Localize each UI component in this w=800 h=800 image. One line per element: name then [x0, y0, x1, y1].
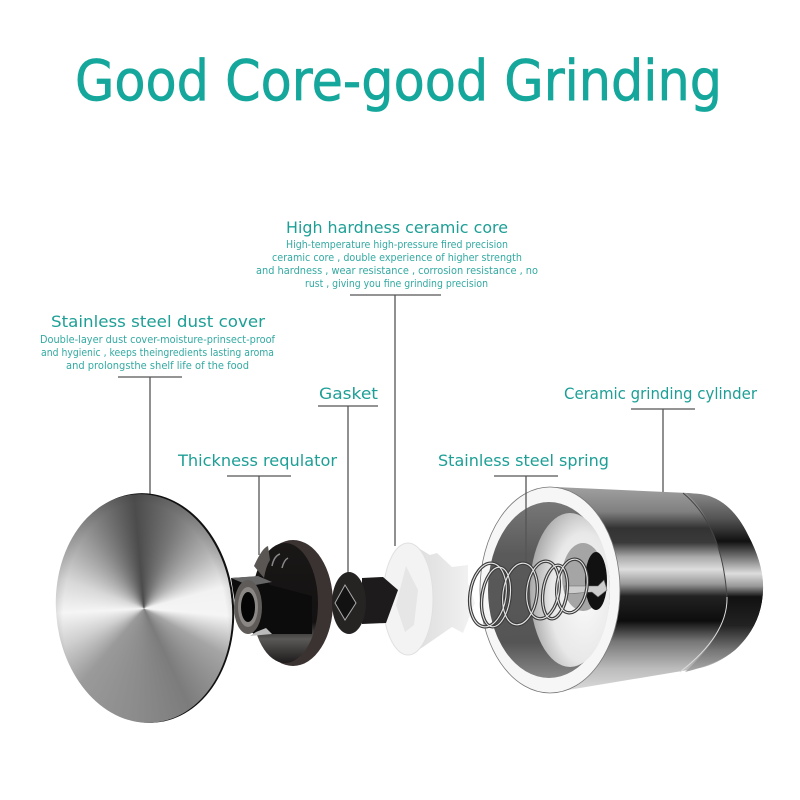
label: stainless steel spring: Stainless steel spring — [438, 451, 609, 470]
leader line: gasket — [318, 406, 378, 573]
leader line: dust cover — [118, 377, 182, 495]
icon: stainless steel spring — [466, 557, 591, 629]
label: stainless steel dust cover: and hygienic , keeps theingredients lasting aroma — [41, 347, 274, 359]
icon: gasket — [332, 572, 398, 634]
leader line: ceramic core — [350, 295, 441, 546]
icon: stainless steel dust cover disc — [48, 486, 244, 730]
label: thickness regulator: Thickness requlator — [177, 451, 337, 470]
label: high hardness ceramic core: ceramic core , double experience of higher strength — [272, 252, 522, 264]
label: stainless steel dust cover: and prolongsthe shelf life of the food — [66, 360, 249, 372]
icon: ceramic core — [383, 543, 475, 655]
label: high hardness ceramic core: and hardness , wear resistance , corrosion resistance , no — [256, 265, 538, 277]
label: high hardness ceramic core: High-temperature high-pressure fired precision — [286, 239, 508, 251]
label: high hardness ceramic core: rust , giving you fine grinding precision — [305, 278, 488, 290]
icon: ceramic grinding cylinder — [480, 487, 763, 693]
label: stainless steel dust cover: Stainless steel dust cover — [51, 312, 265, 331]
label: stainless steel dust cover: Double-layer dust cover-moisture-prinsect-proof — [40, 334, 275, 346]
label: gasket: Gasket — [319, 384, 378, 403]
label: high hardness ceramic core — [256, 218, 538, 290]
leader line: cylinder — [631, 409, 695, 493]
label: ceramic grinding cylinder: Ceramic grinding cylinder — [564, 384, 757, 403]
label: stainless steel dust cover — [40, 312, 275, 372]
leader line: spring — [494, 476, 558, 562]
leader line: regulator — [227, 476, 291, 555]
label: high hardness ceramic core: High hardness ceramic core — [286, 218, 508, 237]
title: Good Core-good Grinding — [75, 49, 722, 114]
icon: thickness regulator — [231, 540, 333, 666]
